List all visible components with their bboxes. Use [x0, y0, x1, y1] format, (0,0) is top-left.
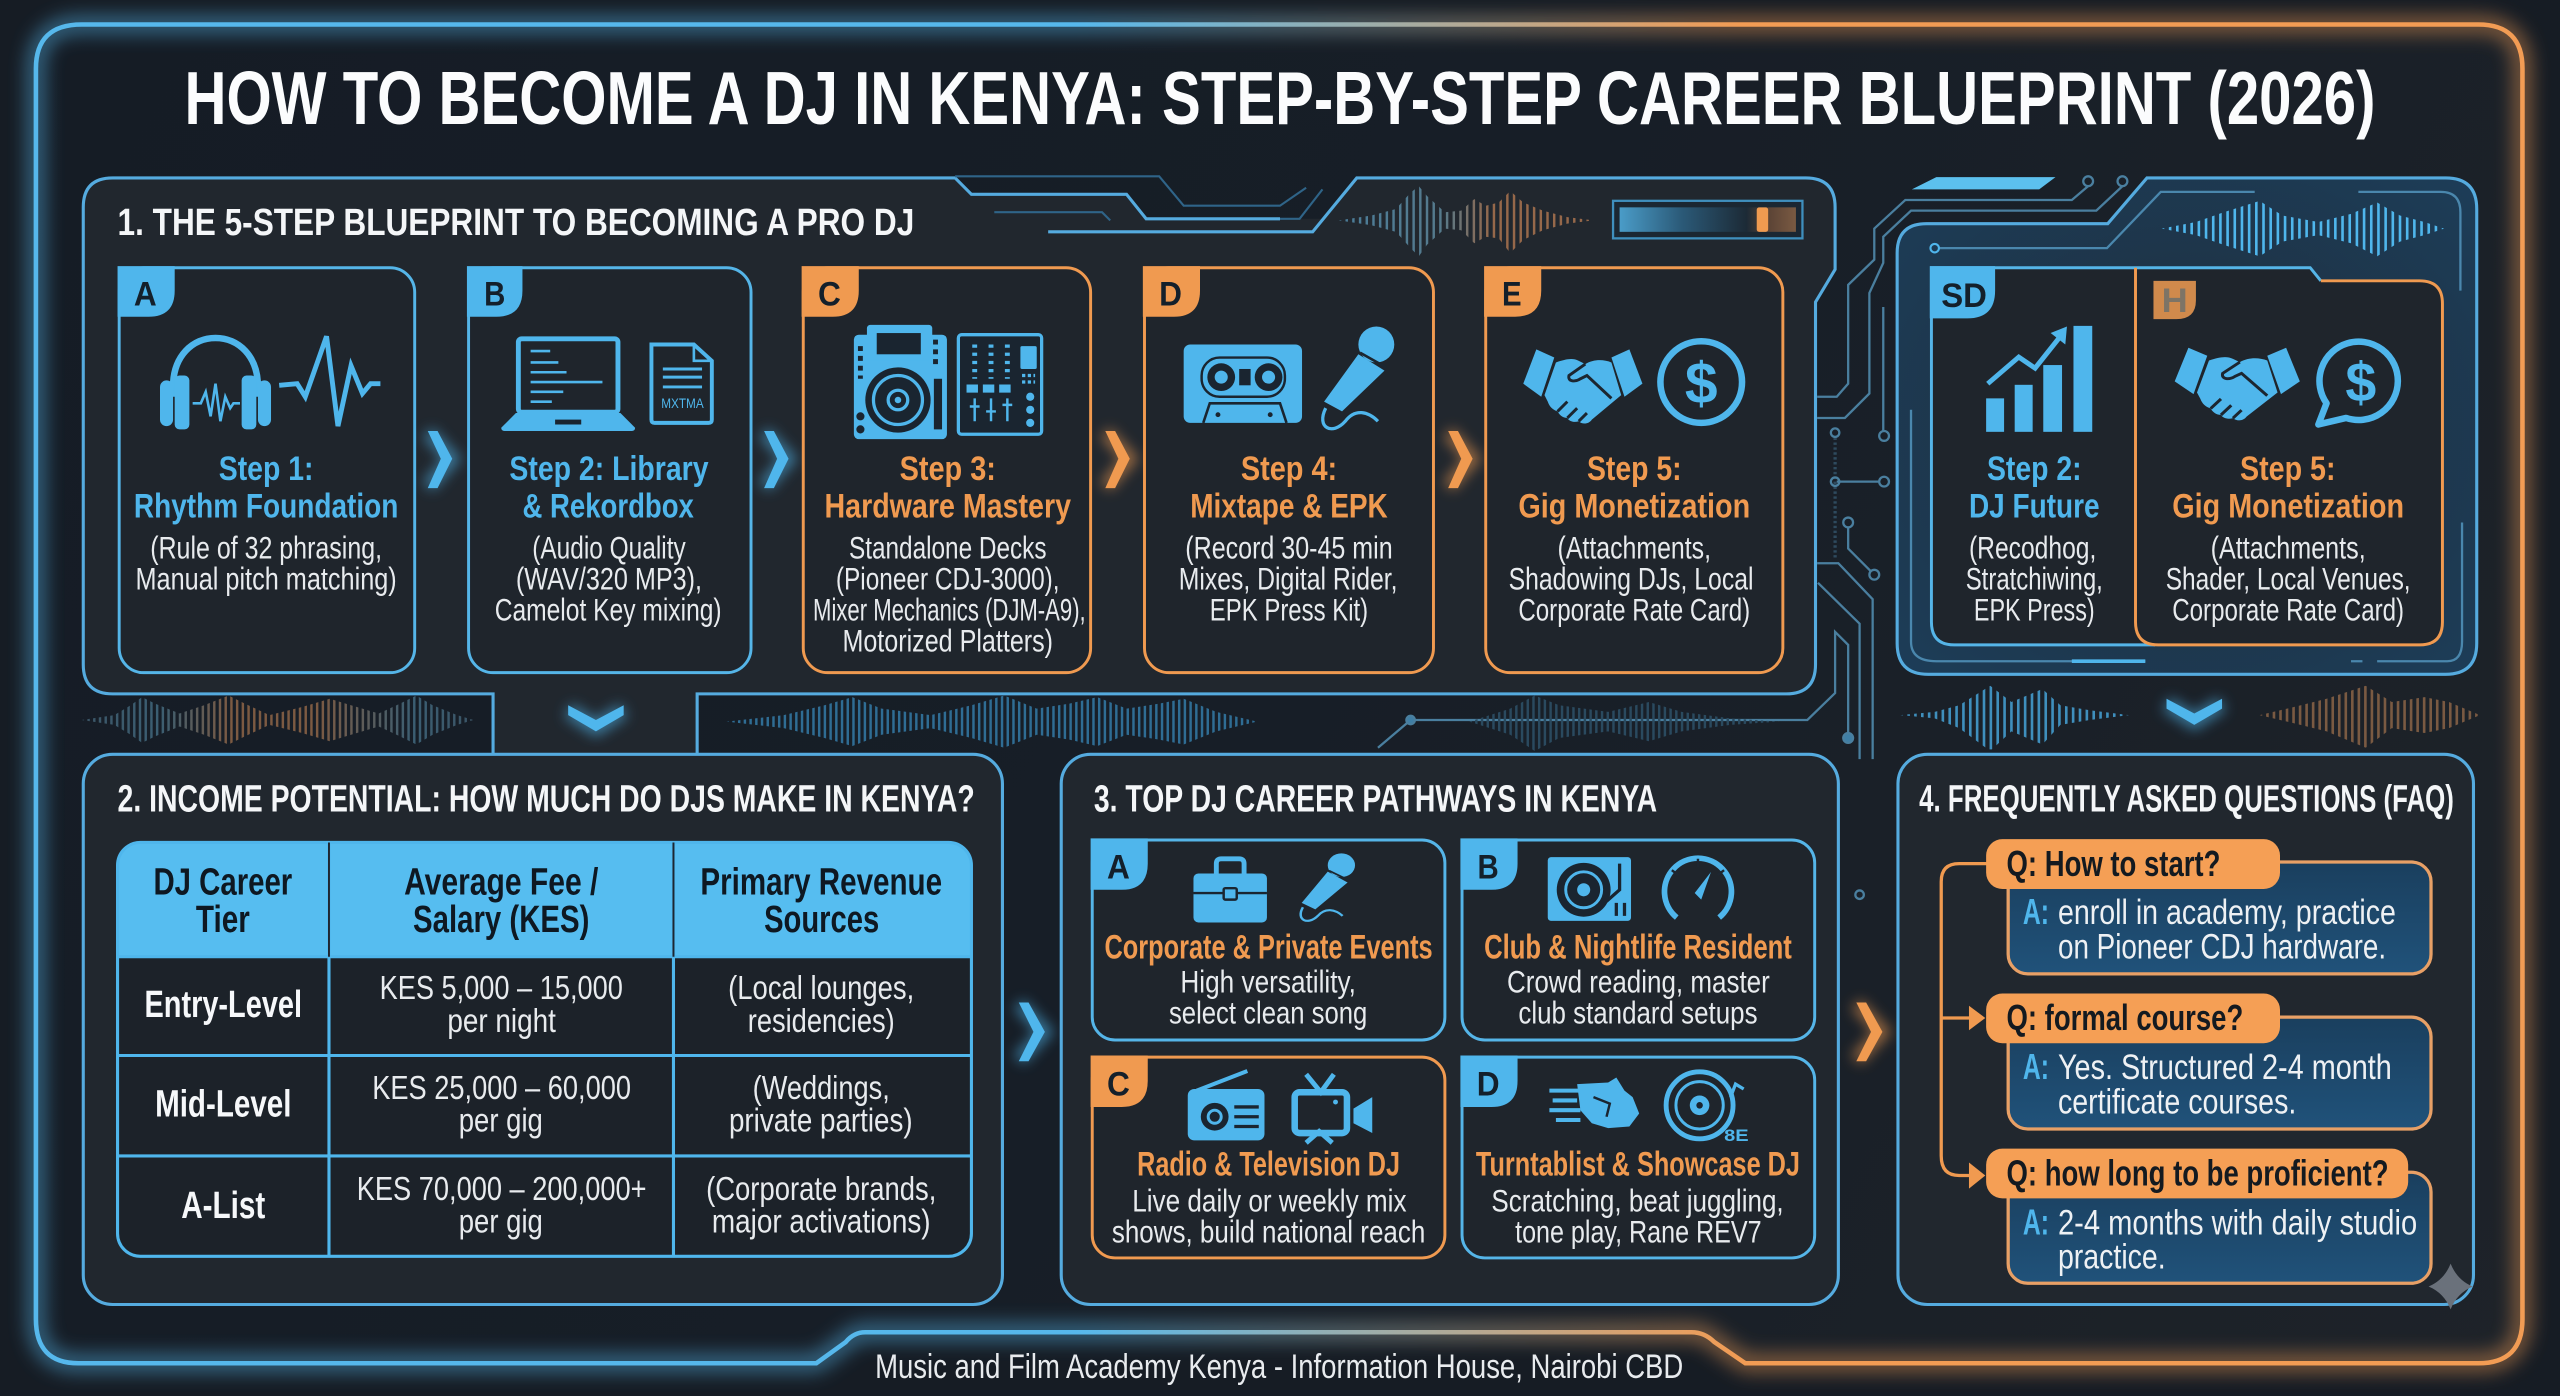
- step D text: Mixes, Digital Rider,: [1179, 561, 1398, 596]
- row mid-level: private parties): [729, 1102, 913, 1139]
- icon: headphones and waveform: [160, 336, 380, 429]
- icon: handshake and dollar: $: [1685, 351, 1718, 416]
- tab H: [2153, 281, 2196, 320]
- panel 2: income potential: [83, 754, 1002, 1304]
- step E text: (Attachments,: [1558, 530, 1711, 565]
- icon: radio and TV: [1188, 1071, 1372, 1143]
- row a-list: (Corporate brands,: [706, 1171, 936, 1208]
- card SD: [1930, 266, 2433, 645]
- answer 3: 2-4 months with daily studio: [2058, 1203, 2417, 1242]
- heading 3: 3. TOP DJ CAREER PATHWAYS IN KENYA: [1094, 777, 1657, 819]
- income table: [118, 842, 971, 1256]
- step C text: Step 3:: [900, 450, 996, 488]
- header labels: Tier: [196, 898, 250, 940]
- step text: [2166, 450, 2411, 627]
- step SD text: EPK Press): [1974, 592, 2095, 627]
- step E text: Gig Monetization: [1518, 488, 1750, 526]
- step D text: [1179, 450, 1398, 627]
- FAQ connector: [1941, 864, 1987, 1189]
- panel 1: 5-step blueprint: [83, 176, 1835, 754]
- inner frame line: [1911, 192, 2462, 661]
- step SD text: Stratchiwing,: [1966, 561, 2103, 596]
- step A text: [134, 450, 398, 596]
- step C text: Standalone Decks: [849, 530, 1047, 565]
- card C: [802, 266, 1091, 673]
- step D text: EPK Press Kit): [1210, 592, 1368, 627]
- step A text: Manual pitch matching): [136, 561, 397, 596]
- step C text: [813, 450, 1086, 658]
- table header: [118, 842, 971, 957]
- pathway C text: [1112, 1146, 1425, 1249]
- pathway D text: [1476, 1146, 1800, 1249]
- row entry-level: [144, 970, 914, 1040]
- panel 1 border: [83, 178, 1835, 754]
- card D: [1143, 266, 1433, 673]
- tab D: [1143, 266, 1200, 317]
- step A text: Rhythm Foundation: [134, 488, 398, 526]
- step C text: Mixer Mechanics (DJM-A9),: [813, 592, 1086, 627]
- step C text: Motorized Platters): [842, 623, 1053, 658]
- answer 3: practice.: [2058, 1238, 2166, 1277]
- slanted accent bar: [1912, 177, 2056, 189]
- tab C: [1091, 1056, 1148, 1107]
- row a-list: major activations): [712, 1204, 931, 1241]
- card E: [1484, 266, 1783, 673]
- tab B: [467, 266, 522, 317]
- tab B: B: [484, 275, 505, 313]
- icon: turntable and gauge: [1548, 857, 1731, 921]
- answer 2: Yes. Structured 2-4 month: [2058, 1048, 2392, 1087]
- row a-list: A-List: [181, 1184, 266, 1226]
- chevron down left: [568, 705, 624, 731]
- step A text: Step 1:: [219, 450, 313, 488]
- pathway D text: Scratching, beat juggling,: [1491, 1183, 1784, 1218]
- tab C: C: [1107, 1066, 1130, 1104]
- waveform: mid centre: [727, 705, 1257, 739]
- icon: handshake and dollar: [1523, 341, 1742, 424]
- step SD text: [1966, 450, 2103, 627]
- pathway C: [1091, 1056, 1445, 1258]
- icon: scratch hand and record: 8E: [1724, 1127, 1749, 1145]
- header labels: Salary (KES): [413, 898, 589, 940]
- pathway B text: Crowd reading, master: [1507, 965, 1770, 1000]
- row a-list: KES 70,000 – 200,000+: [357, 1171, 647, 1208]
- row mid-level: KES 25,000 – 60,000: [372, 1070, 631, 1107]
- arrow 3: [1105, 431, 1130, 488]
- arrow: panel 3 to 4: [1856, 1002, 1882, 1061]
- row entry-level: KES 5,000 – 15,000: [380, 970, 623, 1007]
- icon: handshake and dollar bubble: [2175, 342, 2398, 424]
- question 2: [1986, 993, 2280, 1043]
- row entry-level: Entry-Level: [144, 983, 302, 1025]
- step B text: & Rekordbox: [522, 488, 694, 526]
- card A: [118, 266, 415, 673]
- question 1: Q: How to start?: [2007, 843, 2220, 884]
- pathway C text: shows, build national reach: [1112, 1214, 1425, 1249]
- tab C: C: [818, 275, 841, 313]
- FAQ 3: [1986, 1149, 2431, 1283]
- step A text: (Rule of 32 phrasing,: [150, 530, 382, 565]
- icon: cassette and microphone: [1184, 327, 1394, 429]
- answer 3: [2008, 1172, 2431, 1283]
- pathway A text: High versatility,: [1180, 965, 1356, 1000]
- pathway B text: club standard setups: [1518, 996, 1758, 1031]
- tab B: B: [1478, 848, 1499, 886]
- waveform: right orange: [2260, 695, 2480, 735]
- icon: handshake and dollar bubble: $: [2345, 352, 2376, 414]
- step D text: Mixtape & EPK: [1190, 488, 1388, 526]
- waveform: mid left: [82, 703, 473, 737]
- header labels: Primary Revenue: [700, 861, 942, 903]
- row a-list: per gig: [459, 1204, 543, 1241]
- waveform: mid faint: [1469, 704, 1780, 740]
- waveform: right panel: [2162, 209, 2444, 249]
- pathway D text: Turntablist & Showcase DJ: [1476, 1146, 1800, 1184]
- answer 1: [2008, 862, 2431, 974]
- step E text: Corporate Rate Card): [1518, 592, 1750, 627]
- tab E: E: [1502, 275, 1522, 313]
- waveform: panel 1: [1339, 197, 1593, 243]
- pathway B: [1460, 838, 1815, 1040]
- step B text: [495, 450, 722, 627]
- answer 1: A:: [2023, 891, 2049, 932]
- step E text: Shadowing DJs, Local: [1509, 561, 1753, 596]
- step B text: (Audio Quality: [532, 530, 686, 565]
- tab E: [1484, 266, 1541, 317]
- step text: Step 5:: [2240, 450, 2336, 488]
- step D text: Step 4:: [1241, 450, 1337, 488]
- step SD text: (Recodhog,: [1969, 530, 2096, 565]
- arrow 2: [764, 431, 789, 488]
- step SD text: DJ Future: [1969, 488, 2100, 526]
- row a-list: [181, 1171, 936, 1241]
- tab B: [1460, 838, 1518, 890]
- step D text: (Record 30-45 min: [1185, 530, 1393, 565]
- FAQ 2: [1986, 993, 2431, 1129]
- row entry-level: (Local lounges,: [728, 970, 914, 1007]
- icon: growth chart: [1986, 326, 2092, 432]
- panel outline: [1897, 178, 2477, 674]
- question 3: Q: how long to be proficient?: [2007, 1152, 2389, 1193]
- chevron down right: [2167, 699, 2222, 725]
- circuit decoration: [955, 176, 1322, 220]
- tab D: D: [1159, 275, 1182, 313]
- row entry-level: residencies): [748, 1003, 895, 1040]
- step B text: Step 2: Library: [509, 450, 709, 488]
- step C text: (Pioneer CDJ-3000),: [836, 561, 1060, 596]
- header labels: Average Fee /: [404, 861, 599, 903]
- circuit traces between panels: [1378, 176, 2127, 899]
- tab A: [118, 266, 175, 317]
- tab SD: SD: [1941, 277, 1987, 315]
- arrow: panel 2 to 3: [1019, 1002, 1045, 1061]
- icon: scratch hand and record: [1549, 1072, 1749, 1145]
- slider: [1613, 201, 1802, 238]
- pathway D: [1460, 1056, 1815, 1258]
- heading 1: 1. THE 5-STEP BLUEPRINT TO BECOMING A PRO DJ: [118, 201, 914, 243]
- answer 2: certificate courses.: [2058, 1082, 2296, 1121]
- icon: CDJ deck and mixer: [854, 325, 1042, 439]
- answer 1: on Pioneer CDJ hardware.: [2058, 927, 2386, 966]
- header labels: Sources: [764, 898, 879, 940]
- question 3: [1986, 1149, 2408, 1198]
- sparkle watermark: [2429, 1264, 2473, 1309]
- step text: Shader, Local Venues,: [2166, 561, 2411, 596]
- step C text: Hardware Mastery: [824, 488, 1071, 526]
- question 2: Q: formal course?: [2007, 997, 2243, 1038]
- header labels: [153, 861, 942, 940]
- step E text: Step 5:: [1587, 450, 1682, 488]
- answer 2: A:: [2023, 1046, 2049, 1087]
- pathway A text: Corporate & Private Events: [1104, 928, 1433, 966]
- row mid-level: Mid-Level: [155, 1083, 291, 1125]
- row mid-level: (Weddings,: [753, 1070, 890, 1107]
- tab A: [1091, 838, 1148, 890]
- pathway B text: [1484, 928, 1792, 1031]
- tab D: [1460, 1056, 1518, 1107]
- step SD text: Step 2:: [1987, 450, 2082, 488]
- step B text: (WAV/320 MP3),: [516, 561, 702, 596]
- heading 2: 2. INCOME POTENTIAL: HOW MUCH DO DJS MAKE IN KENYA?: [118, 777, 975, 819]
- arrow 4: [1448, 431, 1473, 488]
- answer 2: [2008, 1017, 2431, 1129]
- icon: laptop and file: MXTMA: [661, 395, 704, 411]
- header labels: DJ Career: [153, 861, 293, 903]
- tab D: D: [1477, 1066, 1500, 1104]
- tab A: A: [134, 275, 157, 313]
- pathway A text: [1104, 928, 1433, 1031]
- panel 3: career pathways: [1061, 754, 1838, 1304]
- panel 4: FAQ: [1898, 754, 2473, 1309]
- card B: [467, 266, 751, 673]
- pathway B text: Club & Nightlife Resident: [1484, 928, 1792, 966]
- pathway A: [1091, 838, 1445, 1040]
- step text: Gig Monetization: [2172, 488, 2404, 526]
- footer: Music and Film Academy Kenya - Information House, Nairobi CBD: [875, 1348, 1683, 1386]
- pathway C text: Live daily or weekly mix: [1132, 1183, 1407, 1218]
- row mid-level: per gig: [459, 1102, 543, 1139]
- step B text: Camelot Key mixing): [495, 592, 722, 627]
- tab A: A: [1107, 848, 1130, 886]
- tab H: H: [2162, 282, 2188, 320]
- tab SD: [1930, 266, 1995, 318]
- step text: Corporate Rate Card): [2172, 592, 2404, 627]
- row entry-level: per night: [447, 1003, 557, 1040]
- row mid-level: [155, 1070, 913, 1139]
- panel 1 background: [83, 178, 1835, 754]
- answer 3: A:: [2023, 1201, 2049, 1242]
- panel: right blueprint echo: [1897, 177, 2477, 674]
- waveform: right blue: [1900, 694, 2129, 736]
- card: gig monetization echo: [2136, 268, 2442, 645]
- arrow 1: [428, 431, 452, 488]
- tab C: [802, 266, 859, 317]
- answer 1: enroll in academy, practice: [2058, 893, 2396, 932]
- pathway C text: Radio & Television DJ: [1137, 1146, 1400, 1184]
- step text: (Attachments,: [2211, 530, 2366, 565]
- pathway A text: select clean song: [1169, 996, 1367, 1031]
- FAQ 1: [1986, 839, 2431, 974]
- pathway D text: tone play, Rane REV7: [1515, 1214, 1762, 1249]
- icon: briefcase and microphone: [1193, 853, 1355, 922]
- step E text: [1509, 450, 1753, 627]
- icon: laptop and file: [501, 339, 712, 431]
